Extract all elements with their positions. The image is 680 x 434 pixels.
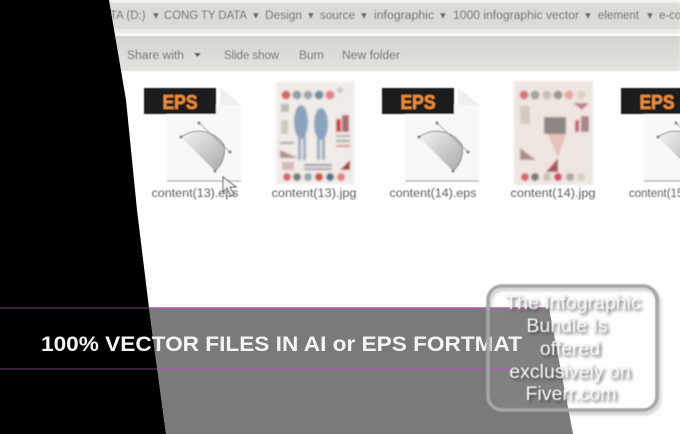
toolbar: Share with <box>127 50 184 62</box>
file: content(14).eps <box>382 87 479 200</box>
address bar: ▾ <box>361 10 367 22</box>
label: content(14).jpg: content(14).jpg <box>510 188 596 200</box>
callout text shadow: Fiverr.com <box>527 385 619 407</box>
callout text shadow: offered <box>542 340 602 362</box>
address bar: TA (D:) <box>110 10 146 22</box>
toolbar: New folder <box>342 50 400 62</box>
address bar: 1000 infographic vector <box>453 10 579 22</box>
callout text: The Infographic <box>505 292 641 314</box>
purple line top bright <box>150 307 546 309</box>
icon: mouse cursor <box>223 177 236 196</box>
callout text shadow <box>507 294 643 407</box>
label: content(13).jpg: content(13).jpg <box>272 188 356 200</box>
callout text shadow: exclusively on <box>511 363 633 385</box>
callout text <box>505 292 641 405</box>
toolbar <box>100 38 680 71</box>
callout box <box>488 286 659 413</box>
toolbar: Burn <box>299 50 324 62</box>
callout text shadow: Bundle Is <box>528 317 610 339</box>
address bar: infographic <box>374 10 434 22</box>
black slanted panel <box>0 0 166 434</box>
file: content(13).eps <box>144 87 241 200</box>
file: content(14).jpg <box>514 81 593 185</box>
address bar <box>100 0 680 38</box>
callout text: exclusively on <box>509 361 631 383</box>
address bar: ▾ <box>153 10 159 22</box>
purple line top <box>0 307 150 309</box>
file: content(14).eps: content(14).eps <box>390 188 477 200</box>
toolbar: Slide show <box>224 50 280 62</box>
address bar: ▾ <box>585 10 591 22</box>
purple line bottom bright <box>157 368 512 370</box>
caption heading: 100% VECTOR FILES IN AI or EPS FORTMAT <box>41 332 522 356</box>
address bar: ▾ <box>253 10 259 22</box>
callout text: Bundle Is <box>526 315 608 337</box>
callout text: offered <box>540 338 600 360</box>
file: content(15).eps partial <box>621 87 680 200</box>
address bar: CONG TY DATA <box>164 10 247 22</box>
address bar: Design <box>265 10 302 22</box>
purple line bottom <box>0 368 157 370</box>
address bar: source <box>320 10 355 22</box>
file: content(13).eps: content(13).eps <box>152 188 239 200</box>
callout text: Fiverr.com <box>525 383 617 405</box>
address bar: ▾ <box>647 10 653 22</box>
address bar: element <box>598 10 640 22</box>
address bar: ▾ <box>308 10 314 22</box>
grey caption panel <box>149 308 573 434</box>
address bar: ▾ <box>440 10 446 22</box>
file: content(13).jpg <box>276 82 354 184</box>
callout text shadow: The Infographic <box>507 294 643 316</box>
